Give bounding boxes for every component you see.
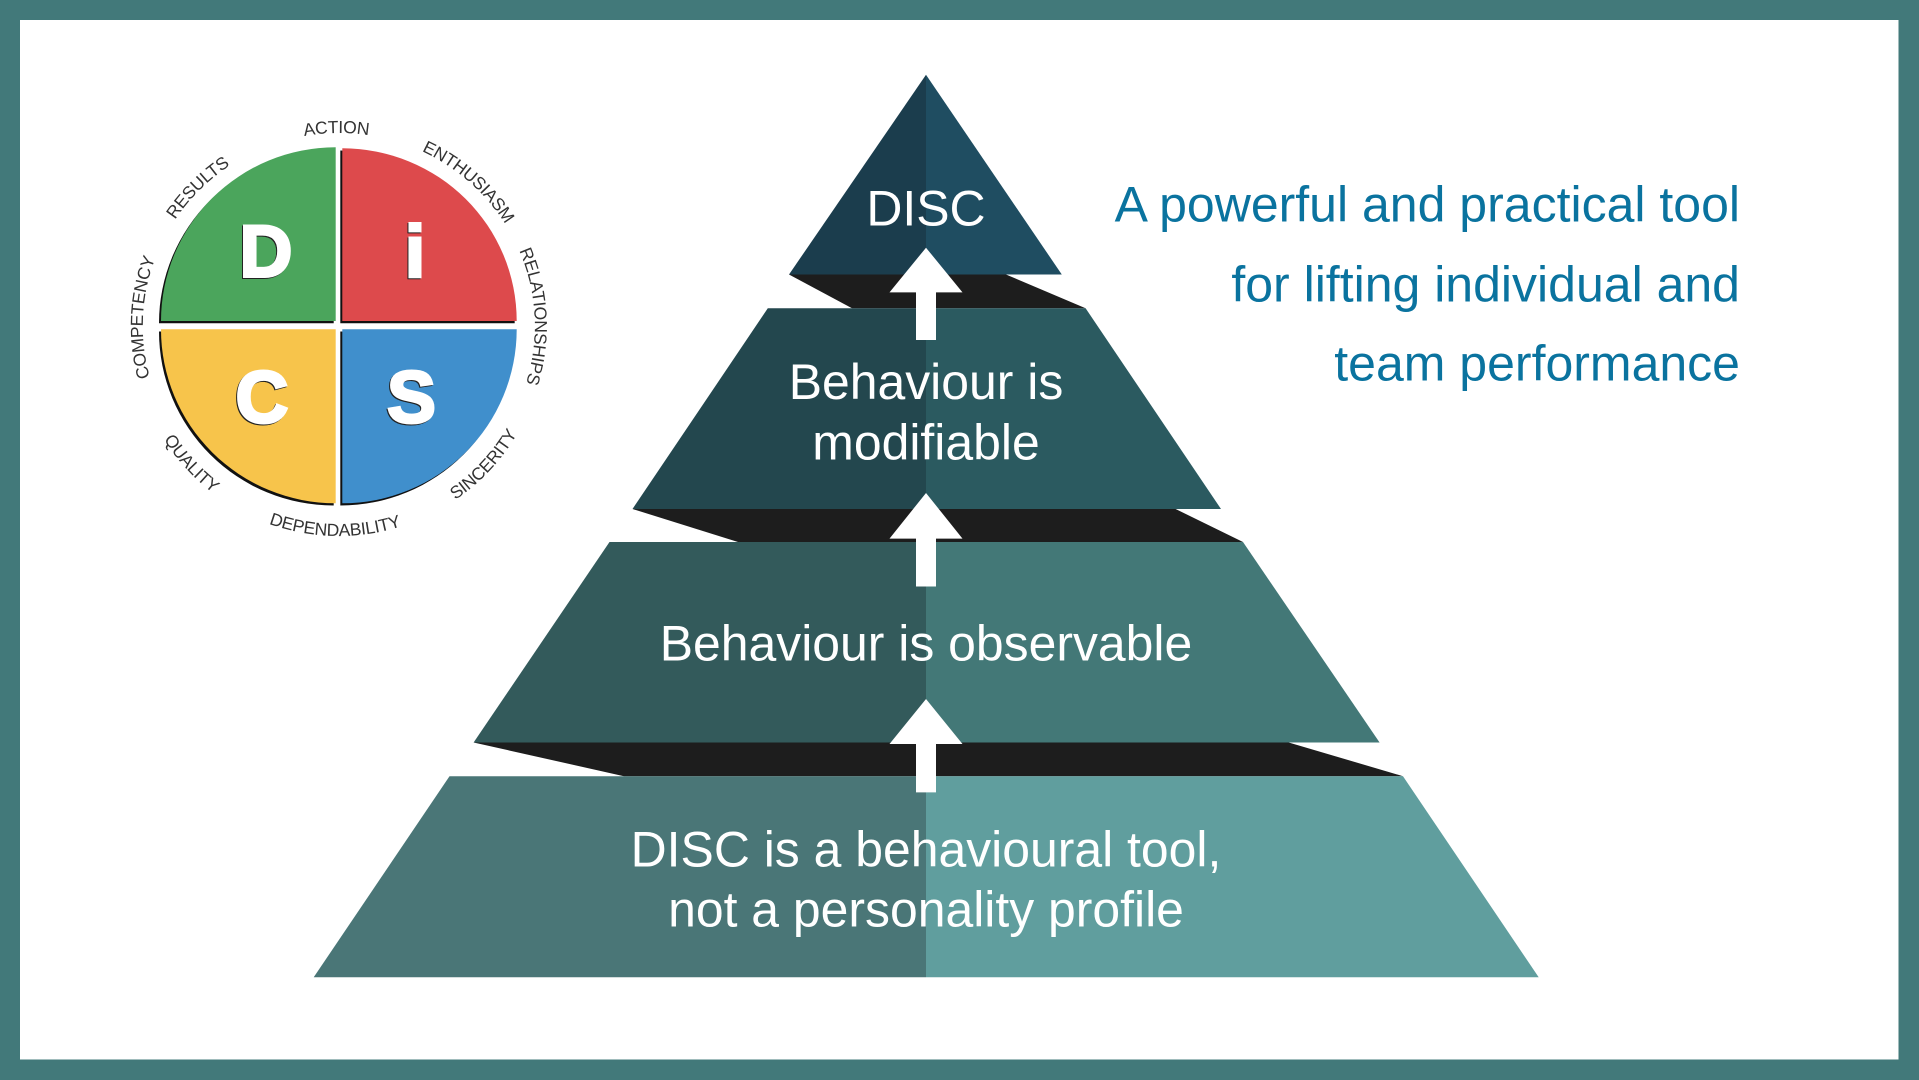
arrow: tool to observable [890,699,962,792]
tier labels: Behaviour is [789,354,1063,410]
tier: behaviour is modifiable [632,308,1221,509]
wheel labels: QUALITY [166,435,220,490]
tier labels: Behaviour is observable [660,616,1192,672]
wheel labels: ENTHUSIASM [423,140,514,223]
tagline: team performance [1334,336,1740,392]
wheel labels [130,120,547,536]
tier labels: DISC is a behavioural tool, [631,821,1221,877]
tier: DISC apex [789,75,1062,274]
wheel labels: ACTION [304,120,369,136]
pyramid [314,75,1539,977]
quadrant: C yellow [161,329,336,503]
tagline: A powerful and practical tool [1115,177,1740,233]
wheel letters: S [387,358,436,438]
wheel labels: SINCERITY [450,428,515,498]
tier labels [631,180,1221,937]
wheel labels: RELATIONSHIPS [520,247,547,385]
wheel labels: DEPENDABILITY [270,512,398,536]
tier labels: modifiable [812,414,1040,470]
DISC wheel [130,120,547,536]
quadrant: S blue [342,329,517,503]
tagline: for lifting individual and [1231,257,1740,313]
tier: behaviour is observable [474,542,1380,742]
quadrant: i red [342,148,517,321]
wheel letters: C [236,358,288,438]
wheel labels: RESULTS [166,157,228,219]
tier labels: DISC [866,180,986,236]
quadrant: D green [161,147,336,321]
wheel quadrant shadows [159,150,515,506]
arrow: observable to modifiable [890,493,962,586]
connector bands [474,274,1403,776]
wheel letters [236,212,436,438]
wheel letters: i [405,212,425,292]
tagline [1115,177,1740,392]
tier labels: not a personality profile [668,881,1184,937]
tier: behavioural tool [314,776,1539,977]
wheel labels: COMPETENCY [130,254,154,378]
wheel letters: D [240,212,292,292]
arrow: modifiable to DISC [890,248,962,340]
